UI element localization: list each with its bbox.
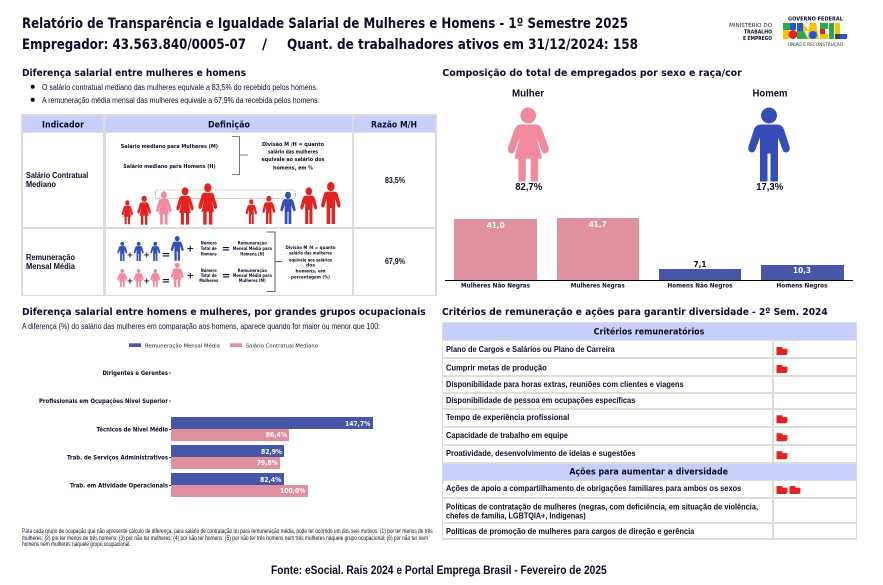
definição: remuneração média homens: Homens bbox=[201, 252, 217, 258]
panel: tabela de critérios: Critérios remuneratórios bbox=[594, 327, 704, 338]
definição: divisão remuneração: homens, em bbox=[296, 269, 326, 275]
definição: remuneração média mulheres: Número bbox=[201, 267, 217, 274]
panel: tabela de indicadores: Mediano bbox=[26, 180, 56, 189]
figuras: mediana salarial bbox=[122, 182, 341, 225]
definição: divisão remuneração: Divisão M /H = quanto bbox=[286, 245, 336, 251]
definição: remuneração média homens: Remuneração bbox=[238, 240, 267, 246]
panel: diferença por grandes grupos ocupacionais bbox=[22, 307, 426, 331]
heading: diferença salarial: Diferença salarial entre mulheres e homens bbox=[22, 68, 246, 79]
panel: tabela de critérios: Capacidade de trabalho em equipe bbox=[446, 431, 568, 440]
definição: remuneração média mulheres: = bbox=[162, 276, 170, 287]
icon: mulher bbox=[508, 88, 549, 193]
definição: remuneração média mulheres: Total de bbox=[201, 273, 217, 279]
definição: remuneração média homens: + bbox=[127, 250, 133, 260]
legend bbox=[129, 342, 319, 350]
title: Quant. de trabalhadores ativos em 31/12/2024: 158 bbox=[287, 37, 638, 53]
footnote bbox=[22, 529, 433, 548]
panel: tabela de indicadores: Remuneração bbox=[26, 253, 75, 262]
definição: remuneração média mulheres: + bbox=[127, 276, 133, 286]
panel: tabela de indicadores: Definição bbox=[208, 120, 250, 130]
panel: tabela de indicadores: Razão M/H bbox=[371, 120, 417, 130]
definição: salário mediano: salário das mulheres bbox=[268, 148, 318, 155]
panel: tabela de critérios: Tempo de experiência profissional bbox=[446, 413, 569, 422]
panel: tabela de indicadores: Indicador bbox=[42, 120, 84, 130]
definição: remuneração média homens: Total de bbox=[201, 246, 217, 252]
panel: tabela de indicadores: Salário Contratual bbox=[26, 171, 88, 180]
title bbox=[22, 16, 638, 53]
panel: tabela de indicadores: 67,9% bbox=[385, 257, 405, 266]
definição: remuneração média homens: + bbox=[187, 244, 194, 254]
panel: tabela de critérios: Ações de apoio a compartilhamento de obrigações familiares para ambos os sexos bbox=[446, 484, 742, 493]
panel: tabela de critérios: Políticas de contratação de mulheres (negras, com deficiência, em situação de violência, bbox=[446, 502, 758, 512]
bar chart: composição: Homens Negros bbox=[776, 282, 828, 290]
definição: remuneração média homens: Número bbox=[201, 240, 217, 246]
panel: tabela de critérios: chefes de família, LGBTQIA+, Indígenas) bbox=[446, 512, 586, 520]
definição: remuneração média homens: + bbox=[143, 250, 150, 260]
panel: tabela de critérios: Proatividade, desenvolvimento de ideias e sugestões bbox=[446, 449, 636, 458]
logo: ministério e governo federal: E EMPREGO bbox=[743, 36, 772, 42]
icons: marcadores vermelhos de homem e mulher bbox=[776, 347, 800, 494]
legend: Remuneração Mensal Média bbox=[145, 342, 220, 350]
definição: remuneração média mulheres: Mulheres bbox=[199, 278, 219, 284]
heading: critérios de remuneração: Critérios de remuneração e ações para garantir diversidade - 2º Sem. 2024 bbox=[442, 306, 828, 318]
bullet list: O salário contratual mediano das mulheres equivale a 83,5% do recebido pelos homens. bbox=[42, 83, 318, 92]
definição: salário mediano: Salário mediano para Mulheres (M) bbox=[121, 143, 218, 150]
bar chart: composição: 10,3 bbox=[793, 266, 811, 275]
bar chart: composição: Homens Não Negros bbox=[668, 282, 733, 290]
definição: divisão remuneração: porcentagem (%) bbox=[291, 275, 330, 281]
icon: homem: 17,3% bbox=[756, 182, 783, 193]
logo: ministério e governo federal: GOVERNO FEDERAL bbox=[788, 16, 844, 22]
definição: divisão remuneração: salário das mulheres bbox=[289, 250, 332, 257]
source: Fonte: eSocial. Rais 2024 e Portal Emprega Brasil - Fevereiro de 2025 bbox=[271, 565, 607, 577]
bar chart: grupos ocupacionais: 86,4% bbox=[266, 431, 287, 439]
definição: salário mediano: equivale ao salário dos bbox=[262, 156, 324, 163]
definição: remuneração média mulheres: = bbox=[222, 271, 230, 282]
panel: tabela de indicadores: 83,5% bbox=[385, 176, 405, 185]
panel: tabela de indicadores bbox=[21, 114, 437, 296]
heading: grupos ocupacionais: Diferença salarial entre homens e mulheres, por grandes grupos ocupacionais bbox=[22, 307, 426, 318]
bar chart: grupos ocupacionais: Trab. em Atividade Operacionais bbox=[70, 484, 169, 490]
panel: tabela de critérios: Plano de Cargos e Salários ou Plano de Carreira bbox=[446, 345, 615, 354]
panel: tabela de critérios bbox=[442, 322, 857, 540]
icon: homem: Homem bbox=[752, 88, 788, 99]
panel: tabela de indicadores: Mensal Média bbox=[26, 262, 76, 271]
footnote: Para cada grupo de ocupação que não apresente cálculo de diferença, para salário de contratação ou para remuneração média, pode ter ocorrido um dos seis motivos: (1) por ter menos de três bbox=[22, 529, 433, 535]
icon: mulher: 82,7% bbox=[515, 182, 542, 193]
definição: remuneração média mulheres: Remuneração bbox=[238, 268, 267, 274]
bar chart: grupos ocupacionais: 147,7% bbox=[345, 420, 370, 428]
bar chart: grupos ocupacionais: 79,8% bbox=[257, 459, 278, 467]
definição: remuneração média mulheres bbox=[117, 263, 272, 287]
definição: salário mediano: Salário mediano para Homens (H) bbox=[123, 163, 216, 170]
definição: salário mediano bbox=[121, 136, 324, 174]
bar chart: grupos ocupacionais bbox=[39, 371, 373, 497]
panel: tabela de critérios: Cumprir metas de produção bbox=[446, 364, 547, 372]
bar chart: grupos ocupacionais: Trab. de Serviços Administrativos bbox=[67, 456, 168, 462]
bar chart: grupos ocupacionais: Dirigentes e Gerentes bbox=[102, 371, 169, 377]
heading: composição: Composição do total de empregados por sexo e raça/cor bbox=[442, 68, 742, 79]
title: Relatório de Transparência e Igualdade Salarial de Mulheres e Homens - 1º Semestre 2025 bbox=[22, 16, 628, 32]
bar chart: grupos ocupacionais: 82,9% bbox=[261, 448, 282, 456]
subtitle: A diferença (%) do salário das mulheres em comparação aos homens, aparece quando for maior ou menor que 100: bbox=[22, 322, 380, 331]
bar chart: grupos ocupacionais: Técnicos de Nível Médio bbox=[96, 426, 168, 434]
bar chart: composição: 7,1 bbox=[694, 260, 707, 269]
bar chart: composição: 41,7 bbox=[589, 220, 607, 229]
definição: divisão remuneração: equivale aos salários bbox=[289, 256, 332, 263]
definição: remuneração média homens: Mensal Média para bbox=[233, 245, 272, 252]
icon: homem bbox=[748, 88, 790, 193]
definição: remuneração média mulheres: Mensal Média para bbox=[233, 272, 272, 279]
definição: remuneração média homens: Homens (H) bbox=[240, 252, 264, 258]
definição: salário mediano: Divisão M /H = quanto bbox=[262, 142, 324, 148]
panel: tabela de critérios: Disponibilidade para horas extras, reuniões com clientes e viagens bbox=[446, 380, 684, 389]
logo: ministério e governo federal: TRABALHO bbox=[744, 30, 772, 36]
logo: ministério e governo federal: UNIÃO E RECONSTRUÇÃO bbox=[788, 41, 843, 48]
bar chart: grupos ocupacionais: Profissionais em Ocupações Nível Superior bbox=[39, 398, 168, 405]
bar chart: grupos ocupacionais: 100,0% bbox=[280, 487, 305, 495]
definição: remuneração média homens bbox=[117, 236, 272, 261]
bar chart: composição: 41,0 bbox=[487, 221, 505, 230]
footnote: mulheres; (2) por ter menos de três homens; (3) por não ter mulheres; (4) por não ter homens; (5) por não ter três homens nem três mulheres naquele grupo ocupacional; (6) por não ter nem bbox=[22, 536, 428, 542]
panel: tabela de critérios: Políticas de promoção de mulheres para cargos de direção e gerência bbox=[446, 527, 695, 536]
definição: remuneração média homens: = bbox=[222, 244, 230, 255]
footnote: homens nem mulheres naquele grupo ocupacional. bbox=[22, 542, 131, 548]
legend: Salário Contratual Mediano bbox=[246, 342, 319, 350]
panel: tabela de critérios: Disponibilidade de pessoa em ocupações específicas bbox=[446, 396, 636, 405]
panel: tabela de critérios: Ações para aumentar a diversidade bbox=[569, 468, 728, 478]
title: Empregador: 43.563.840/0005-07 bbox=[22, 37, 246, 53]
panel: composição por sexo e raça/cor bbox=[442, 68, 790, 193]
bullet list: A remuneração média mensal das mulheres equivale a 67,9% da recebida pelos homens. bbox=[42, 96, 320, 105]
bar chart: grupos ocupacionais: 82,4% bbox=[260, 476, 281, 484]
logo: ministério e governo federal bbox=[729, 16, 847, 48]
definição: remuneração média mulheres: + bbox=[187, 272, 194, 282]
bar chart: composição: Mulheres Não Negras bbox=[461, 282, 530, 290]
definição: salário mediano: homens, em % bbox=[273, 165, 314, 171]
bullet list bbox=[31, 83, 319, 105]
definição: remuneração média mulheres: Mulheres (M) bbox=[239, 278, 266, 284]
bar chart: composição: Mulheres Negras bbox=[571, 282, 625, 290]
icon: mulher: Mulher bbox=[512, 88, 544, 99]
bar chart: composição bbox=[445, 218, 853, 290]
definição: remuneração média mulheres: + bbox=[143, 276, 150, 286]
definição: divisão remuneração bbox=[267, 232, 336, 292]
title: / bbox=[262, 37, 268, 53]
definição: divisão remuneração: dos bbox=[306, 262, 315, 268]
logo: ministério e governo federal: MINISTÉRIO DO bbox=[729, 21, 772, 29]
definição: remuneração média homens: = bbox=[162, 250, 170, 261]
panel: diferença salarial entre mulheres e homens bbox=[22, 68, 320, 105]
